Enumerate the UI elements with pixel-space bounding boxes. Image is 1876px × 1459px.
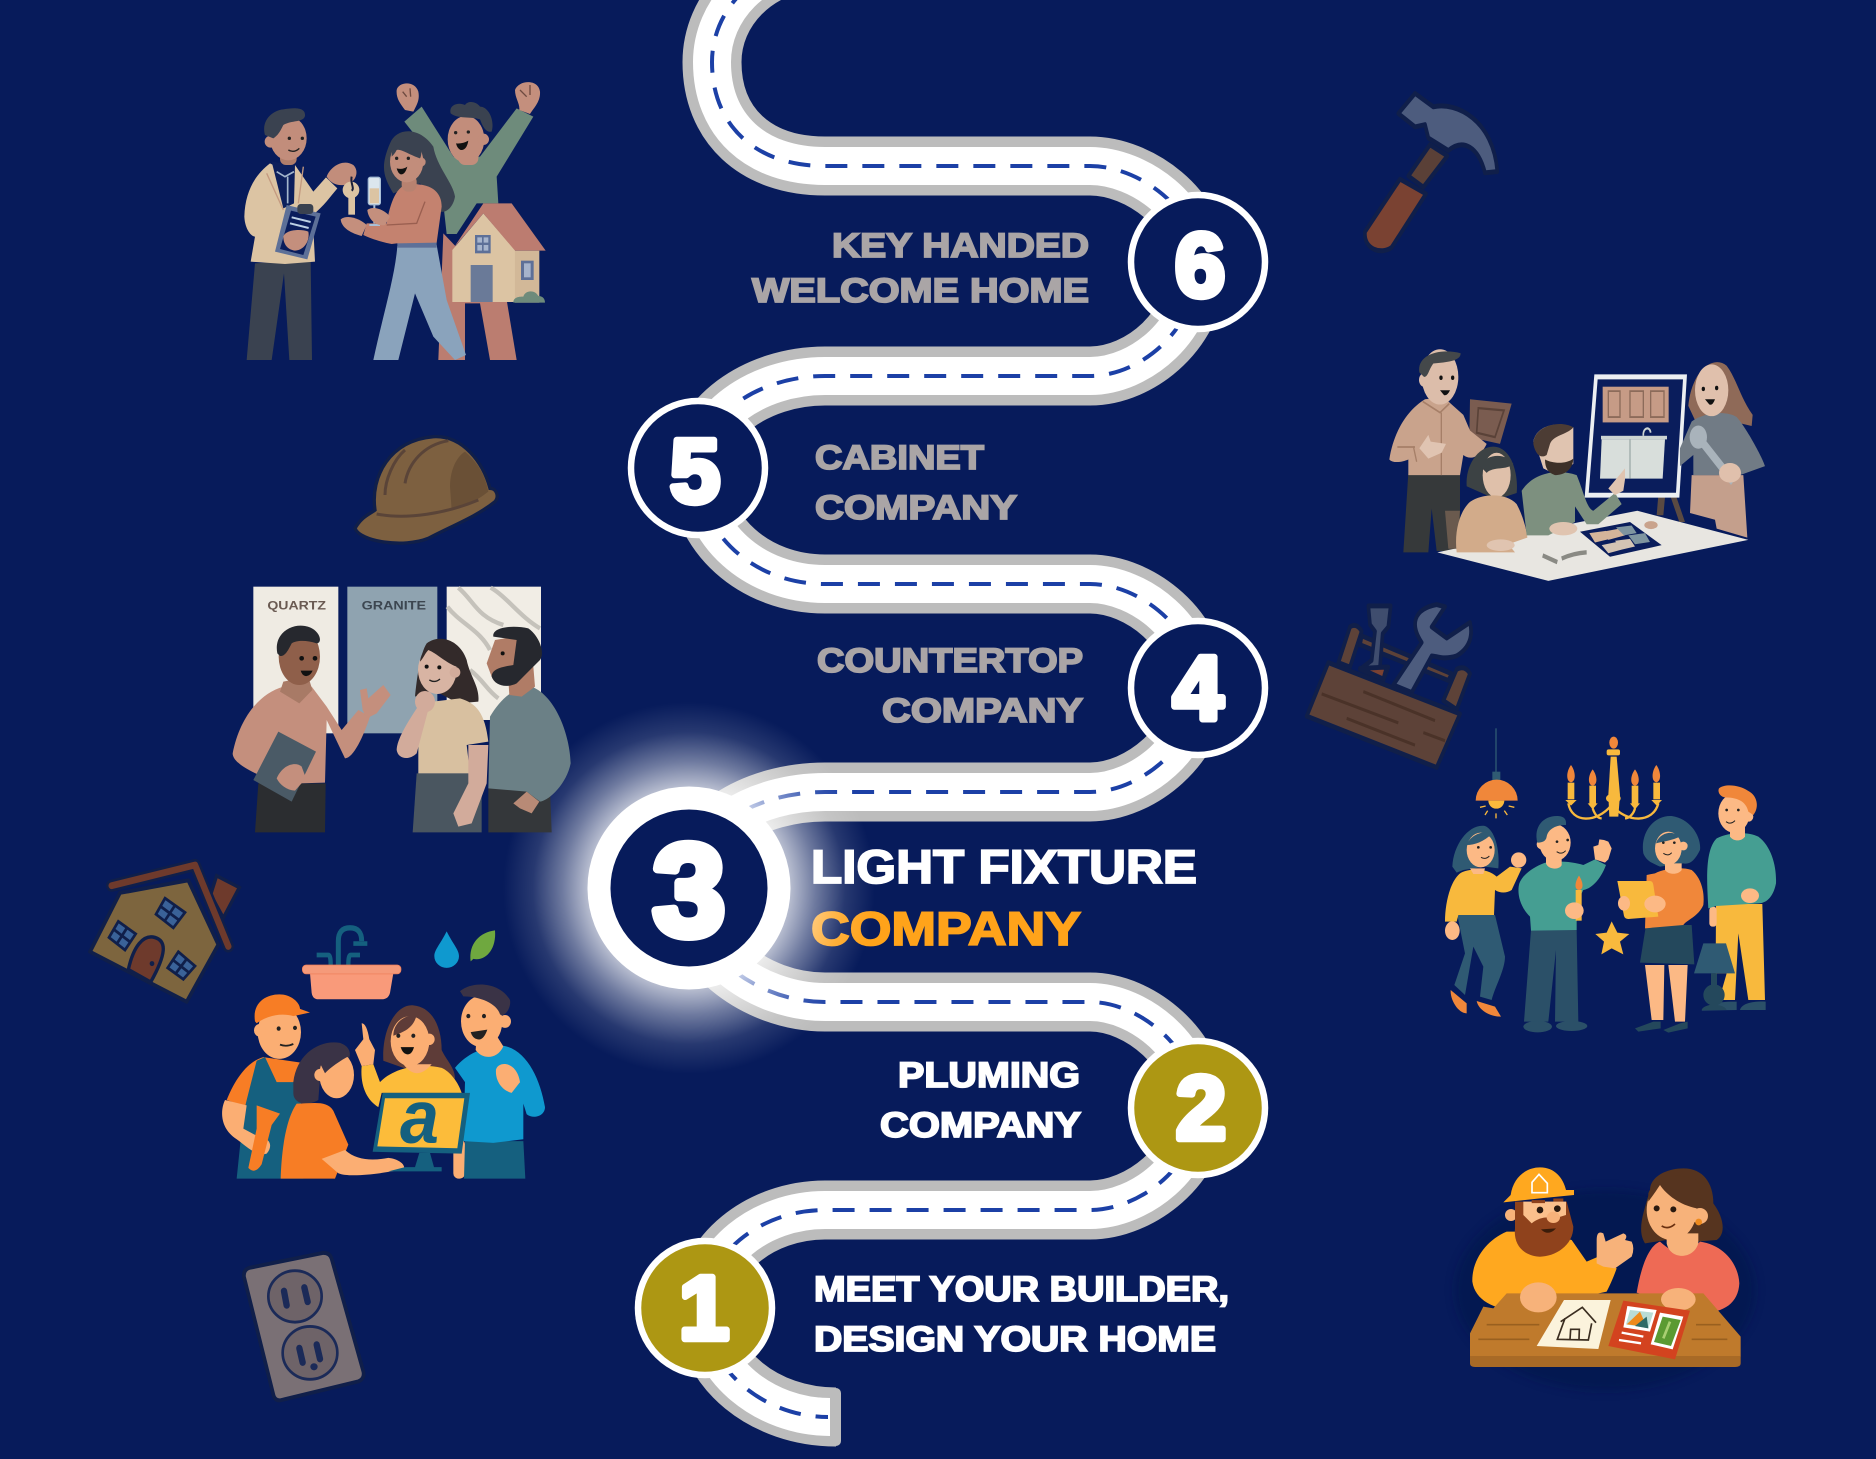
person: consultant: [233, 626, 391, 832]
label: step 3 highlighted: [811, 840, 1197, 955]
icon: hard hat: [355, 437, 497, 543]
label: step 6: WELCOME HOME: [752, 272, 1089, 310]
label: step 1: DESIGN YOUR HOME: [814, 1320, 1216, 1359]
label: step 4: COMPANY: [882, 692, 1083, 730]
marker 1: [638, 1241, 772, 1375]
illustration: light fixture group: [1445, 728, 1776, 1033]
winding road: [689, 0, 1198, 1446]
marker 1: 1: [679, 1259, 729, 1359]
person: bearded man: [487, 627, 571, 832]
person: builder: [1472, 1167, 1633, 1311]
marker 6: 6: [1175, 216, 1225, 316]
soft shadow: [1455, 1190, 1755, 1390]
table: [1470, 1282, 1741, 1367]
person: standing man with sample: [1389, 349, 1512, 552]
people seated at table: [1445, 424, 1625, 552]
sample panels: [253, 587, 541, 733]
step labels: [752, 227, 1229, 1359]
icon: small house: [452, 203, 546, 303]
illustration: meet your builder: [1455, 1167, 1755, 1390]
icon: water drop: [434, 931, 459, 968]
label: step 1: [814, 1270, 1229, 1359]
person: cheering man: [397, 82, 540, 360]
marker 2: [1131, 1041, 1265, 1175]
person: woman at computer: [281, 1042, 404, 1179]
label: step 5: CABINET: [815, 439, 984, 477]
person: woman with wrench: [1680, 362, 1765, 538]
marker 6: [1131, 195, 1265, 329]
label: step 6: KEY HANDED: [832, 227, 1089, 265]
person: woman with glass: [341, 131, 466, 360]
illustration: plumbing planning: [222, 928, 545, 1179]
person: agent with clipboard and key: [244, 108, 359, 360]
icon: house sketch paper: [1537, 1300, 1611, 1349]
icon: leaf: [470, 930, 495, 961]
icon: tilted house: [90, 865, 239, 1002]
illustration: cabinet design: [1389, 349, 1765, 581]
marker 5: 5: [670, 422, 720, 522]
label: step 1: MEET YOUR BUILDER,: [814, 1270, 1229, 1309]
person: man with candle: [1518, 816, 1612, 1032]
label: step 3 highlighted: COMPANY: [811, 902, 1081, 955]
label: step 2: COMPANY: [880, 1106, 1081, 1145]
icon: hammer: [1365, 93, 1497, 251]
icon: pendant lamp: [1476, 728, 1518, 818]
icon: display board: [1587, 377, 1685, 522]
icon: monitor: a: [400, 1076, 439, 1159]
label: step 2: PLUMING: [898, 1056, 1080, 1095]
person: man in blue: [453, 984, 545, 1179]
label: step 4: [817, 642, 1083, 730]
marker 3: 3: [653, 817, 725, 963]
marker 2: 2: [1176, 1059, 1226, 1159]
label: step 6: [752, 227, 1089, 310]
icon: red brochure: [1608, 1301, 1690, 1359]
illustration: key handover: [244, 82, 546, 360]
icon: star: [1595, 921, 1629, 954]
icon: electrical outlet: [244, 1253, 364, 1400]
step markers: [599, 195, 1265, 1375]
label: step 4: COUNTERTOP: [817, 642, 1083, 680]
sample panels: QUARTZ: [267, 599, 327, 613]
marker 4: 4: [1173, 639, 1223, 739]
label: step 2: [880, 1056, 1081, 1145]
marker 3: [599, 798, 779, 978]
label: step 5: [815, 439, 1017, 527]
glow behind step 3: [503, 702, 875, 1074]
icon: monitor: [373, 1076, 470, 1171]
person: plumber: [222, 994, 310, 1179]
marker 5: [631, 401, 765, 535]
table with samples: [1437, 511, 1748, 581]
person: woman thinking: [397, 639, 488, 832]
label: step 3 highlighted: LIGHT FIXTURE: [811, 840, 1197, 893]
icon: chandelier: [1565, 737, 1662, 819]
sample panels: GRANITE: [362, 599, 426, 613]
icon: toolbox: [1307, 605, 1471, 768]
person: client woman: [1637, 1168, 1739, 1313]
illustration: countertop selection: [233, 587, 571, 832]
icon: table lamp: [1694, 943, 1735, 1010]
person: woman with tablet: [1617, 816, 1704, 1033]
person: woman pointing: [355, 1005, 462, 1107]
person: tall man: [1702, 785, 1776, 1011]
marker 4: [1131, 621, 1265, 755]
label: step 5: COMPANY: [815, 489, 1017, 527]
icon: sink with faucet: [302, 928, 401, 999]
person: woman in yellow: [1445, 826, 1526, 1017]
